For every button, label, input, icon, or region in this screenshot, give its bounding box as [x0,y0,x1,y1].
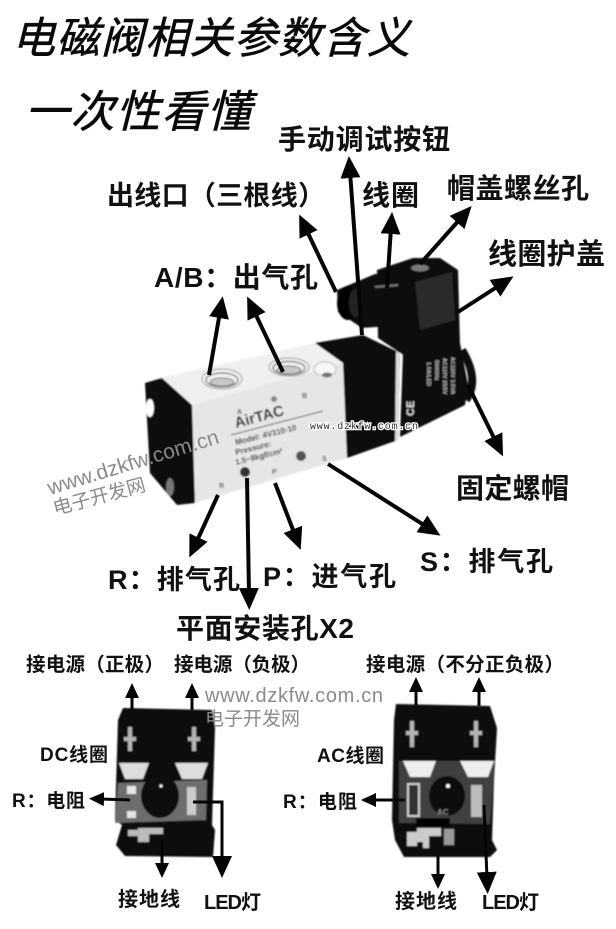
label: DC resistor: R：电阻 [12,790,85,812]
label: DC negative: 接电源（负极） [174,654,310,676]
arrow: AC ground [436,855,440,878]
AirTAC label text [219,393,327,490]
AirTAC label text: 1.5~8kgf/cm² [234,446,284,467]
circuit board [115,780,207,823]
AirTAC label text: B [302,393,307,400]
watermark: centre: www.dzkfw.com.cn [204,685,383,707]
arrow: AC resistor [372,798,405,802]
arrow: R [196,495,218,543]
arrow: DC LED [193,802,222,862]
arrow: AC LED [484,805,487,878]
label: P: P：进气孔 [263,562,396,592]
arrow: cap screw [420,218,461,264]
front holes [240,396,306,477]
AC coil connector photo: AC [437,808,449,817]
title [12,15,413,137]
label: DC positive: 接电源（正极） [26,654,164,676]
arrow: DC negative [190,694,194,710]
label: AC power: 接电源（不分正负极） [366,654,564,676]
label: fixing nut: 固定螺帽 [456,473,569,504]
arrow: B [254,311,283,372]
coil body: AC110V 25/5V [441,358,447,395]
label: S: S：排气孔 [420,547,553,577]
label: manual button: 手动调试按钮 [278,124,450,155]
left black end cap [145,378,195,505]
arrow: outlet [306,229,336,292]
watermark: centre: 电子开发网 [205,708,300,730]
port B [269,358,309,376]
label: coil: 线圈 [362,180,419,211]
arrow: fixing nut [468,385,496,442]
label: outlet: 出线口（三根线） [107,181,325,211]
arrow: AC power right [478,688,480,706]
AirTAC label text: AirTAC [233,402,286,432]
arrows: upper valve [196,172,500,594]
label: A/B: A/B：出气孔 [154,262,318,293]
arrow: DC resistor [100,799,130,800]
terminals [119,727,208,842]
small mounting hole [314,362,336,378]
arrow: AC power left [414,688,418,706]
label: AC LED: LED灯 [482,891,539,914]
AirTAC label text: Pressure: [234,439,272,457]
coil body: 1.0A/LED [425,362,431,386]
arrow: DC positive [130,694,134,710]
fixing nut [462,350,472,400]
watermark: centre [204,685,383,730]
arrow: coil [387,228,391,288]
label: AC resistor: R：电阻 [283,791,357,813]
AirTAC label text: S [322,456,327,463]
AirTAC label text: A [237,409,242,416]
AirTAC label text: P [272,469,277,476]
cable gland [337,274,410,328]
label: DC ground: 接地线 [118,888,180,911]
watermark: rotated left: www.dzkfw.com.cn [44,426,222,500]
arrow: coil cover [458,285,500,312]
coil body: 50/60Hz [433,360,439,381]
arrow: mounting [247,478,249,594]
arrow: manual button [350,172,362,335]
coil body: AC220V 3.5VA [449,357,455,394]
port A [202,369,242,389]
arrow: DC ground [160,840,164,867]
watermark: small centre: www.dzkfw.com.cn [310,421,418,433]
label: coil cover: 线圈护盖 [488,238,605,271]
arrow: A [209,312,220,375]
label: cap screw: 帽盖螺丝孔 [447,173,589,204]
solenoid valve photo [145,258,472,505]
label: DC coil: DC线圈 [40,744,108,766]
pilot block [315,335,400,458]
watermark: rotated left: 电子开发网 [51,474,148,520]
arrow: S [328,464,427,527]
label: mounting holes: 平面安装孔X2 [176,613,354,644]
coil body [377,258,468,437]
AirTAC label text: Model: 4V310-10 [234,423,298,447]
AC coil connector photo [392,704,497,857]
valve body top face [160,343,343,405]
title: 一次性看懂 [25,88,258,137]
arrows: connectors [100,688,487,878]
circuit board [399,761,495,824]
AirTAC label text: R [219,483,224,490]
valve body front face [192,363,347,503]
label: AC coil: AC线圈 [317,745,384,767]
DC coil connector photo [115,708,215,857]
label: R: R：排气孔 [108,565,240,595]
terminals [403,721,494,848]
label: DC LED: LED灯 [204,891,261,914]
arrow: P [275,483,295,535]
title: 电磁阀相关参数含义 [12,15,413,63]
label: AC ground: 接地线 [395,890,457,913]
coil body: CE [405,401,417,416]
